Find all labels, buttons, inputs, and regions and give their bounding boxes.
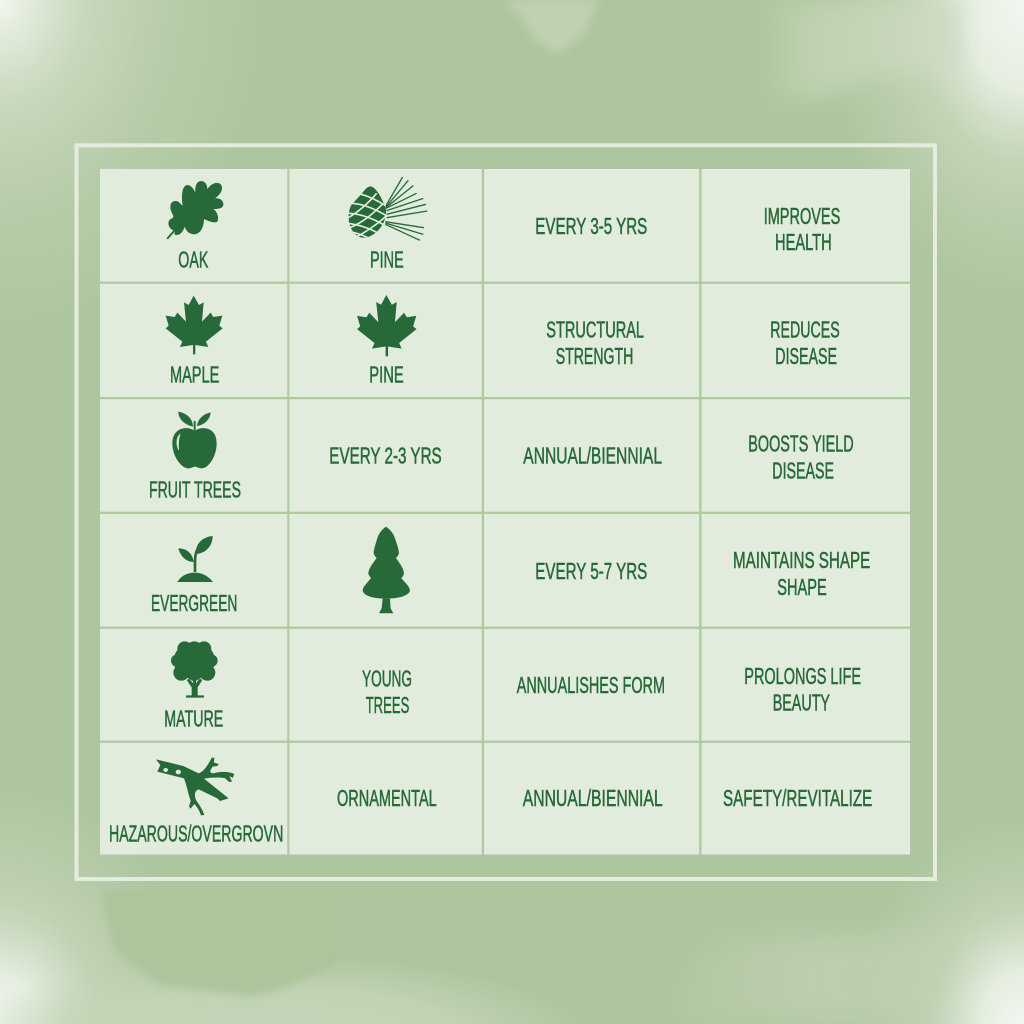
row 4 cell 1: evergreen [100,514,287,627]
label: maple: MAPLE [170,361,219,387]
row 6 cell 4: benefit [702,743,910,854]
label: hazardous / overgrown: HAZAROUS/OVERGROVN [109,820,283,846]
row 2 cell 1: maple [100,284,287,397]
row 2 cell 2: pine with maple leaf [289,284,482,397]
row 4 cell 4: benefit: MAINTAINS SHAPE [733,547,870,573]
row 1 cell 3: interval [484,169,699,282]
row 4 cell 4: benefit [702,514,910,627]
row 1 cell 2: pine cone [289,169,482,282]
row 6 cell 1: hazardous [100,743,287,854]
row 6 cell 3: interval [484,743,699,854]
row 1 cell 4: benefit [702,169,910,282]
row 5 cell 4: benefit [702,629,910,741]
label: evergreen: EVERGREEN [151,590,237,616]
row 3 cell 4: benefit [702,399,910,512]
row 3 cell 4: benefit: DISEASE [772,458,834,484]
label: pine: PINE [370,246,404,272]
row 4 cell 4: benefit: SHAPE [777,574,827,600]
row 3 cell 2: interval [289,399,482,512]
row 2 cell 3: purpose [484,284,699,397]
icon: round tree [171,641,218,698]
row 2 cell 4: benefit [702,284,910,397]
row 4 cell 2: fir tree [289,514,482,627]
icon: apple [172,412,217,468]
row 6 cell 4: benefit: SAFETY/REVITALIZE [723,785,872,811]
table [100,169,910,854]
row 3 cell 2: interval: EVERY 2-3 YRS [329,442,442,468]
row 4 cell 3: interval [484,514,699,627]
row 5 cell 2: young trees [289,629,482,741]
icon: oak leaf [166,181,223,239]
row 5 cell 3: purpose: ANNUALISHES FORM [517,672,665,698]
icon: broken branch [156,757,234,815]
icon: fir tree [363,527,410,613]
row 1 cell 3: interval: EVERY 3-5 YRS [535,213,647,239]
row 5 cell 4: benefit: PROLONGS LIFE [744,663,861,689]
row 2 cell 3: purpose: STRENGTH [556,343,633,369]
row 3 cell 3: interval [484,399,699,512]
row 1 cell 1: oak [100,169,287,282]
label: mature: MATURE [164,706,223,732]
row 2 cell 3: purpose: STRUCTURAL [546,316,644,342]
row 5 cell 2: young trees: YOUNG [362,666,412,692]
row 6 cell 2: ornamental: ORNAMENTAL [337,785,437,811]
row 3 cell 3: interval: ANNUAL/BIENNIAL [523,442,662,468]
outer frame [76,145,935,879]
row 5 cell 4: benefit: BEAUTY [773,690,830,716]
icon: sprout [177,536,213,582]
row 2 cell 4: benefit: DISEASE [775,343,837,369]
row 5 cell 1: mature [100,629,287,741]
icon: maple leaf [357,295,417,356]
icon: pine cone and needles [347,177,427,240]
row 6 cell 2: ornamental [289,743,482,854]
label: pine: PINE [369,361,404,387]
row 4 cell 3: interval: EVERY 5-7 YRS [535,558,647,584]
row 3 cell 1: fruit trees [100,399,287,512]
row 2 cell 4: benefit: REDUCES [770,316,840,342]
icon: maple leaf [166,296,223,354]
row 6 cell 3: interval: ANNUAL/BIENNIAL [523,785,663,811]
row 3 cell 4: benefit: BOOSTS YIELD [748,431,854,457]
row 1 cell 4: benefit: HEALTH [775,229,832,255]
row 5 cell 2: young trees: TREES [366,692,409,718]
label: oak: OAK [178,246,208,272]
label: fruit trees: FRUIT TREES [149,476,241,502]
row 5 cell 3: purpose [484,629,699,741]
row 1 cell 4: benefit: IMPROVES [764,203,840,229]
